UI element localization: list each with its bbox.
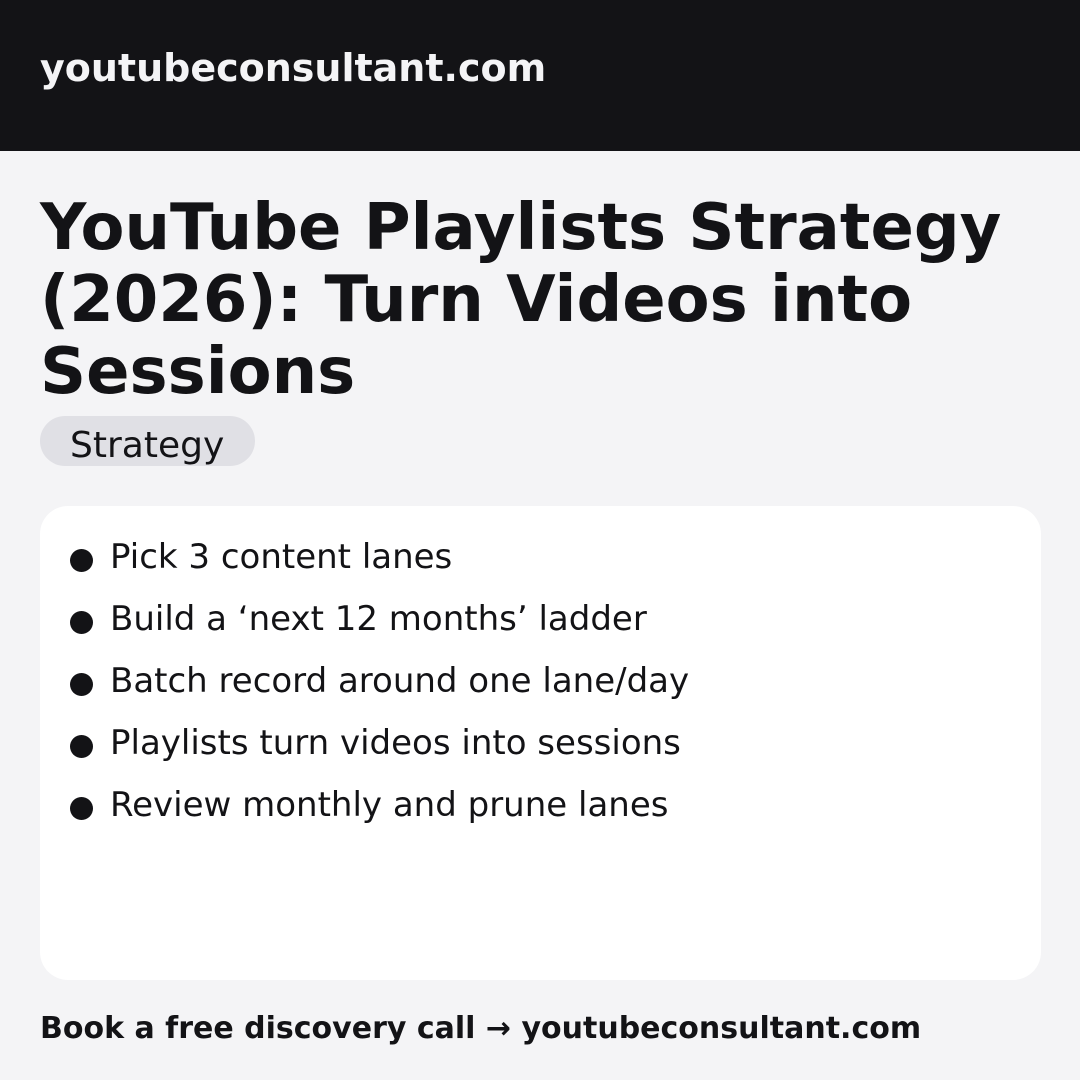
header bar — [0, 0, 1080, 151]
bullet 5: Review monthly and prune lanes — [110, 785, 668, 825]
brand name: youtubeconsultant.com — [40, 46, 546, 90]
bullet 2: Build a ‘next 12 months’ ladder — [110, 599, 647, 639]
bullet 4: Playlists turn videos into sessions — [110, 723, 681, 763]
title: YouTube Playlists Strategy (2026): Turn Videos into Sessions — [40, 191, 1001, 409]
panel: bullet list — [40, 506, 1041, 980]
bullet 3: Batch record around one lane/day — [110, 661, 689, 701]
footer call to action: Book a free discovery call → youtubeconsultant.com — [40, 1011, 921, 1046]
category pill: Strategy — [70, 425, 224, 466]
category pill — [40, 416, 255, 466]
bullet 1: Pick 3 content lanes — [110, 537, 452, 577]
